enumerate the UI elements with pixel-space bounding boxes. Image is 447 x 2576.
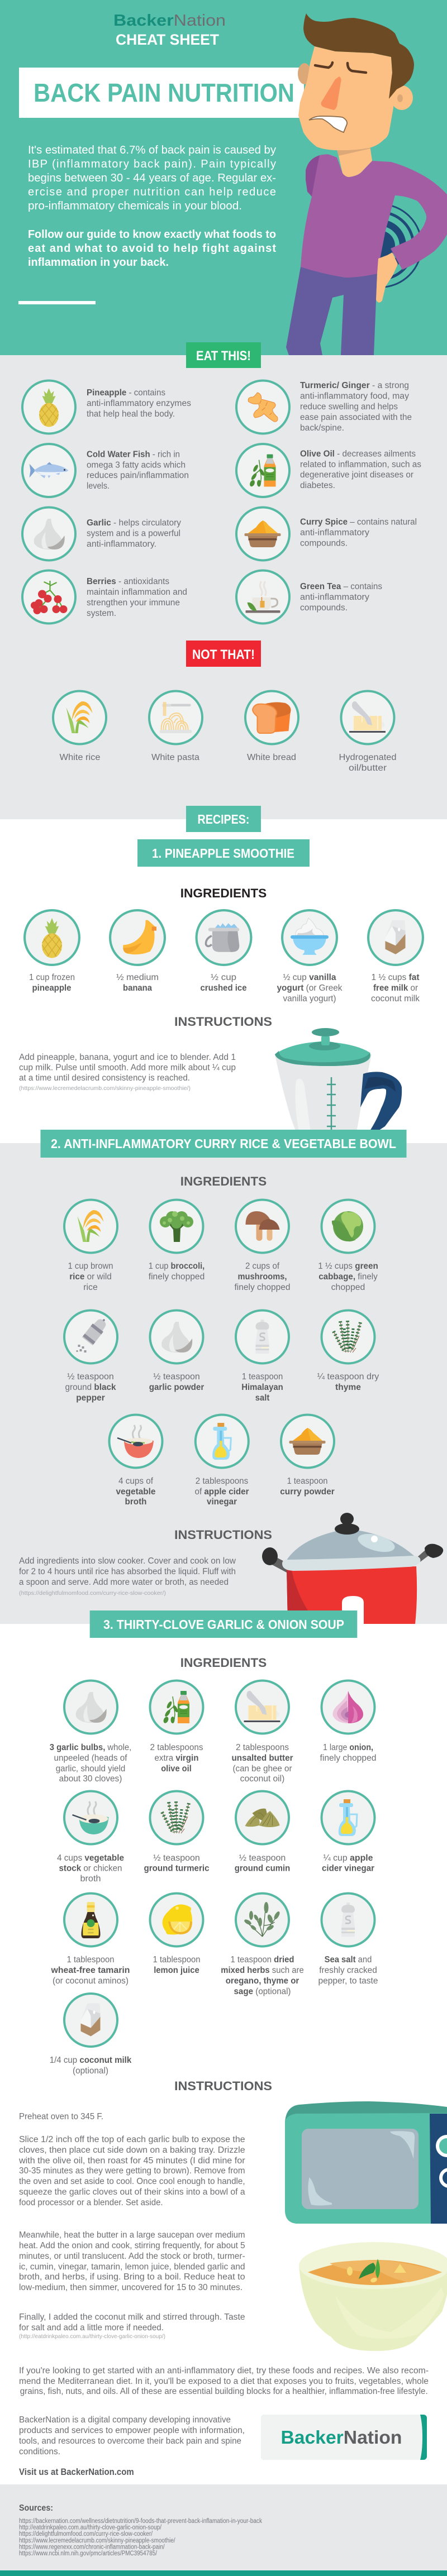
intro paragraph: It's estimated that 6.7% of back pain is caused by [28,144,276,156]
intro paragraph: pro-inflammatory chemicals in your blood. [28,200,242,212]
recipe banner [90,1610,357,1638]
instructions text [19,1053,236,1092]
recipe banner: 2. ANTI-INFLAMMATORY CURRY RICE & VEGETABLE BOWL [51,1136,396,1151]
label: recipes [186,806,261,832]
instructions text: (https://delightfulmomfood.com/curry-rice-slow-cooker/) [19,1590,166,1597]
ingredient: garlic powder: garlic powder [149,1383,204,1392]
ingredient: onion: finely chopped [320,1753,377,1763]
ingredient: curry powder: 1 teaspoon [287,1476,327,1486]
illustration: man with back pain [286,13,447,355]
about BackerNation: tools, and resources to overcome their back pain and spine [19,2436,241,2446]
ingredient: ground cumin [235,1791,290,1873]
illustration: slow cooker [262,1513,443,1624]
ingredient: banana: ½ medium [116,973,159,982]
ingredient: sea salt and pepper: freshly cracked [319,1966,377,1975]
instructions text: Meanwhile, heat the butter in a large saucepan over medium [19,2230,245,2240]
ingredient: apple cider vinegar: cider vinegar [322,1864,374,1873]
sources: https://delightfulmomfood.com/curry-rice-slow-cooker/ [19,2531,153,2537]
heading: instructions: INSTRUCTIONS [174,1528,272,1542]
food: cold water fish: omega 3 fatty acids which [87,460,186,470]
food: olive oil: Olive Oil - decreases ailments [300,449,416,459]
ingredient: apple cider vinegar: ¼ cup apple [323,1853,373,1863]
ingredient: broccoli: 1 cup broccoli, [149,1261,205,1271]
food: turmeric and ginger [236,381,412,433]
ingredient: ground turmeric: ground turmeric [144,1864,210,1873]
instructions text: for salt and add a little more if needed. [19,2323,164,2333]
ingredient: vegetable stock: stock or chicken [59,1864,122,1873]
food: turmeric and ginger: anti-inflammatory food, may [300,391,409,401]
closing paragraph: grains, fish, nuts, and oils. All of these are essential building blocks for a healthier, inflammation-free lifestyle. [20,2387,428,2396]
food: pineapple [22,381,191,433]
instructions text: 30-35 minutes as they were getting to brown). Remove from [19,2166,245,2176]
ingredient: pineapple [25,910,79,993]
ingredient: unsalted butter: 2 tablespoons [236,1743,289,1752]
ingredient: garlic powder [149,1310,204,1392]
ingredient: ground turmeric [144,1791,210,1873]
ingredient: apple cider vinegar [194,1415,249,1507]
ingredient: crushed ice: crushed ice [200,983,247,993]
ingredient: vegetable broth: 4 cups of [118,1476,154,1486]
ingredient: onion: 1 large onion, [323,1743,373,1752]
food: white pasta [149,691,202,762]
intro paragraph: begins between 30 - 44 years of age. Regular ex- [28,172,276,184]
instructions text: cloves, then place cut side down on a baking tray. Drizzle [19,2145,245,2155]
food: curry spice: Curry Spice – contains natural [300,517,417,527]
food: berries [22,571,187,623]
food: white bread [245,691,298,762]
ingredient: milk: coconut milk [371,994,420,1003]
food: berries: strengthen your immune [87,598,180,608]
guide paragraph: Follow our guide to know exactly what foods to [28,228,276,241]
ingredient: dry thyme [317,1310,379,1392]
ingredient: vanilla yogurt: ½ cup vanilla [283,973,336,982]
ingredient: onion [320,1681,377,1763]
instructions text [19,1556,236,1597]
recipe banner [137,839,310,867]
ingredient: dried mixed herbs: sage (optional) [234,1987,291,1996]
label: eat this: EAT THIS! [196,348,251,364]
ingredient: vegetable stock [57,1791,124,1884]
instructions text: for 2 to 4 hours until rice has absorbed the liquid. Fluff with [19,1567,236,1576]
food: cold water fish [22,444,189,497]
sources: https://www.regenexx.com/chronic-inflammation-back-pain/ [19,2544,165,2551]
ingredient: vanilla yogurt: vanilla yogurt) [283,994,336,1003]
ingredient: pineapple: pineapple [32,983,72,993]
food: hydrogenated oil and butter: oil/butter [349,763,387,773]
ingredient: apple cider vinegar: 2 tablespoons [196,1476,248,1486]
ingredient: ground turmeric: ½ teaspoon [153,1853,200,1863]
food: white rice [53,691,106,762]
about BackerNation: Visit us at BackerNation.com [19,2467,134,2477]
food: olive oil: degenerative joint diseases or [300,470,413,480]
food: curry spice: anti-inflammatory [300,528,369,537]
ingredient: garlic bulbs: unpeeled (heads of [54,1753,127,1763]
title bar: BACK PAIN NUTRITION [34,78,294,107]
ingredient: milk [368,910,423,1003]
ingredient: broccoli [149,1199,205,1282]
heading: ingredients: INGREDIENTS [180,1174,267,1188]
ingredient: vegetable stock: 4 cups vegetable [57,1853,124,1863]
subtitle: cheat sheet: CHEAT SHEET [116,31,219,48]
ingredient: wheat-free tamarin: (or coconut aminos) [53,1976,129,1986]
food: curry spice: compounds. [300,538,348,548]
ingredient: garlic powder: ½ teaspoon [153,1372,200,1382]
panel: recipe 2 curry rice bowl [19,1130,443,1624]
heading: instructions: INSTRUCTIONS [174,2079,272,2093]
instructions text: with the olive oil, then roast for 45 minutes (I did mine for [18,2156,245,2166]
food: pineapple: Pineapple - contains [87,388,165,398]
instructions text: ic, cumin, vinegar, tamarin, lemon juice, blended garlic and [19,2262,245,2272]
recipe banner [40,1130,407,1158]
food: garlic: system and is a powerful [87,529,180,538]
food: hydrogenated oil and butter: Hydrogenated [339,753,397,762]
ingredient: apple cider vinegar [322,1791,374,1873]
food: olive oil: diabetes. [300,481,335,490]
ingredient: dried mixed herbs: oregano, thyme or [226,1976,299,1986]
recipe banner: 1. PINEAPPLE SMOOTHIE [152,846,294,861]
instructions text: low-medium, then simmer, uncovered for 15 to 30 minutes. [19,2283,242,2292]
ingredient: sea salt and pepper [318,1893,378,1986]
food: turmeric and ginger: Turmeric/ Ginger - a strong [300,381,409,390]
ingredient: ground cumin: ½ teaspoon [239,1853,286,1863]
food: garlic: anti-inflammatory. [87,539,156,549]
closing paragraph: mend the Mediterranean diet. In it, you'll be exposed to a diet that exposes you to fruits, vegetables, whole [19,2377,429,2386]
instructions text [18,2112,245,2340]
food: cold water fish: reduces pain/inflammation [87,471,189,480]
ingredient: olive oil: extra virgin [154,1753,199,1763]
ingredient: wheat-free tamarin: wheat-free tamarin [50,1966,130,1975]
ingredient: coconut milk [50,1994,132,2076]
ingredient: green cabbage [318,1199,378,1292]
food: turmeric and ginger: back/spine. [300,423,344,433]
logo card: BackerNation [280,2427,402,2448]
ingredient: vanilla yogurt [277,910,343,1003]
food: pineapple: that help heal the body. [87,409,175,419]
instructions text: Finally, I added the coconut milk and stirred through. Taste [19,2312,245,2322]
ingredient: himalayan salt: Himalayan [241,1383,283,1392]
illustration: soup bowl [299,2242,447,2351]
ingredient: lemon juice [150,1893,203,1975]
sources [19,2503,262,2557]
ingredient: olive oil: 2 tablespoons [150,1743,203,1752]
food: white bread: White bread [247,753,296,762]
food: garlic [22,507,181,561]
ingredient: vegetable broth: vegetable [116,1487,156,1497]
ingredient: brown rice [64,1199,117,1292]
food: green tea: Green Tea – contains [300,582,382,591]
ingredient: black pepper [64,1310,117,1403]
ingredient: ground cumin: ground cumin [235,1864,290,1873]
food: cold water fish: levels. [87,481,110,491]
illustration: oven [285,2101,447,2224]
instructions text: minutes, or until translucent. Add the stock or broth, turmer- [19,2252,245,2261]
ingredient: wheat-free tamarin [50,1893,130,1986]
closing paragraph [19,2366,429,2396]
intro paragraph [28,144,276,212]
ingredient: olive oil [150,1681,203,1774]
about BackerNation: conditions. [19,2447,60,2456]
instructions text: Preheat oven to 345 F. [19,2112,103,2121]
panel: not that [53,641,397,773]
ingredient: garlic bulbs: 3 garlic bulbs, whole, [50,1743,131,1752]
ingredient: mushrooms: finely chopped [235,1283,291,1292]
instructions text: (https://www.lecremedelacrumb.com/skinny-pineapple-smoothie/) [19,1085,191,1092]
heading: ingredients: INGREDIENTS [180,1656,267,1670]
ingredient: sea salt and pepper: Sea salt and [325,1955,372,1965]
instructions text: food processor or a blender. Set aside. [19,2198,163,2207]
ingredient: green cabbage: 1 ½ cups green [318,1261,378,1271]
ingredient: banana [110,910,165,993]
about BackerNation: BackerNation is a digital company developing innovative [19,2415,231,2425]
food: berries: maintain inflammation and [87,587,187,597]
food: turmeric and ginger: reduce swelling and helps [300,402,398,412]
ingredient: dry thyme: ¼ teaspoon dry [317,1372,379,1382]
food: olive oil: related to inflammation, such as [300,460,421,469]
ingredient: milk: 1 ½ cups fat [371,973,419,982]
about BackerNation: products and services to empower people with information, [19,2426,245,2435]
instructions text: a spoon and serve. Add more water or broth, as needed [19,1578,229,1587]
ingredient: vegetable broth: broth [125,1497,146,1507]
ingredient: brown rice: 1 cup brown [68,1261,113,1271]
food: green tea: anti-inflammatory [300,592,369,602]
ingredient: vanilla yogurt: yogurt (or Greek [277,983,343,993]
ingredient: himalayan salt [236,1310,289,1403]
heading: instructions: INSTRUCTIONS [174,1015,272,1029]
ingredient: garlic bulbs [50,1681,131,1784]
label: not that [186,641,261,667]
recipe banner: 3. THIRTY-CLOVE GARLIC & ONION SOUP [103,1617,344,1632]
food: cold water fish: Cold Water Fish - rich in [87,450,180,459]
instructions text: (http://eatdrinkpaleo.com.au/thirty-clove-garlic-onion-soup/) [19,2333,165,2340]
food: white pasta: White pasta [151,753,199,762]
ingredient: coconut milk: (optional) [73,2066,108,2076]
ingredient: black pepper: pepper [76,1393,105,1403]
illustration: blender [275,1028,402,1132]
panel: recipe 1 pineapple smoothie [19,839,423,1132]
food: berries: system. [87,609,116,618]
logo card [261,2415,427,2460]
ingredient: vegetable stock: broth [80,1874,101,1884]
food: curry spice [236,507,417,561]
ingredient: apple cider vinegar: vinegar [207,1497,237,1507]
ingredient: coconut milk: 1/4 cup coconut milk [50,2056,132,2065]
ingredient: apple cider vinegar: of apple cider [194,1487,249,1497]
sources: http://eatdrinkpaleo.com.au/thirty-clove-garlic-onion-soup/ [19,2524,162,2531]
ingredient: unsalted butter: (can be ghee or [232,1764,292,1774]
ingredient: sea salt and pepper: pepper, to taste [318,1976,378,1986]
ingredient: crushed ice [197,910,251,993]
ingredient: green cabbage: chopped [331,1283,365,1292]
instructions text: the oven and set aside to cool. Once cool enough to handle, [19,2177,245,2186]
instructions text: broth, and herbs, if using. Bring to a boil. Reduce heat to [19,2272,245,2282]
ingredient: curry powder [280,1415,335,1497]
intro paragraph: IBP (inflammatory back pain). Pain typically [28,158,276,170]
instructions text: at a time until desired consistency is reached. [19,1073,190,1083]
guide paragraph: inflammation in your back. [28,256,169,269]
instructions text: cup milk. Pulse until smooth. Add more milk about ¼ cup [19,1063,236,1072]
closing paragraph: If you're looking to get started with an anti-inflammatory diet, try these foods and recipes. We also recom- [19,2366,429,2376]
ingredient: lemon juice: lemon juice [154,1966,199,1975]
ingredient: black pepper: ½ teaspoon [67,1372,114,1382]
food: pineapple: anti-inflammatory enzymes [87,399,191,408]
intro paragraph: ercise and proper nutrition can help reduce [28,186,276,198]
ingredient: brown rice: rice [83,1283,98,1292]
ingredient: mushrooms: mushrooms, [238,1272,287,1282]
ingredient: olive oil: olive oil [161,1764,192,1774]
sources: https://backernation.com/wellness/dietnutrition/9-foods-that-prevent-back-inflamation-in-your-back [19,2518,262,2525]
heading: ingredients: INGREDIENTS [180,886,267,900]
ingredient: mushrooms [235,1199,291,1292]
ingredient: wheat-free tamarin: 1 tablespoon [67,1955,114,1965]
ingredient: pineapple: 1 cup frozen [29,973,75,982]
instructions text: Add pineapple, banana, yogurt and ice to blender. Add 1 [19,1053,236,1062]
guide paragraph: eat and what to avoid to help fight against [28,242,276,255]
ingredient: lemon juice: 1 tablespoon [153,1955,200,1965]
food: green tea [236,571,382,623]
about BackerNation [19,2415,245,2477]
panel: eat this foods [22,381,421,623]
instructions text: squeeze the garlic cloves out of their skins into a bowl of a [19,2187,245,2197]
food: berries: Berries - antioxidants [87,577,169,586]
food: hydrogenated oil and butter [339,691,397,773]
sources: https://www.ncbi.nlm.nih.gov/pmc/articles/PMC3954785/ [19,2550,158,2557]
ingredient: curry powder: curry powder [280,1487,335,1497]
ingredient: himalayan salt: salt [255,1393,269,1403]
title bar [19,68,304,118]
guide paragraph [28,228,276,269]
ingredient: dried mixed herbs [221,1893,304,1996]
ingredient: dry thyme: thyme [335,1383,361,1392]
sources: Sources: [19,2503,53,2513]
label: eat this [186,342,261,368]
ingredient: green cabbage: cabbage, finely [318,1272,378,1282]
ingredient: vegetable broth [110,1415,162,1507]
panel: recipe 3 garlic and onion soup [18,1610,447,2351]
food: white rice: White rice [59,753,101,762]
food: olive oil [236,444,421,497]
ingredient: unsalted butter: unsalted butter [231,1753,293,1763]
ingredient: mushrooms: 2 cups of [245,1261,280,1271]
label: recipes: RECIPES: [198,812,249,826]
panel: header [18,12,447,368]
instructions text: Add ingredients into slow cooker. Cover and cook on low [19,1556,236,1566]
ingredient: crushed ice: ½ cup [211,973,236,982]
logo: BackerNation: Backer Nation [113,12,226,30]
instructions text: heat. Add the onion and cook, stirring frequently, for about 5 [19,2241,245,2250]
ingredient: unsalted butter [231,1681,293,1784]
ingredient: unsalted butter: coconut oil) [240,1774,284,1784]
instructions text: Slice 1/2 inch off the top of each garlic bulb to expose the [19,2135,245,2144]
ingredient: garlic bulbs: garlic, should yield [56,1764,125,1774]
ingredient: dried mixed herbs: mixed herbs such are [221,1966,304,1975]
ingredient: brown rice: rice or wild [69,1272,112,1282]
sources: https://www.lecremedelacrumb.com/skinny-pineapple-smoothie/ [19,2537,175,2544]
label: not that: NOT THAT! [192,647,255,662]
ingredient: broccoli: finely chopped [149,1272,205,1282]
food: turmeric and ginger: ease pain associated with the [300,413,412,422]
food: garlic: Garlic - helps circulatory [87,518,181,528]
ingredient: milk: free milk or [373,983,418,993]
ingredient: dried mixed herbs: 1 teaspoon dried [230,1955,294,1965]
ingredient: garlic bulbs: about 30 cloves) [59,1774,122,1784]
food: green tea: compounds. [300,603,348,613]
ingredient: himalayan salt: 1 teaspoon [242,1372,283,1382]
ingredient: banana: banana [123,983,152,993]
ingredient: black pepper: ground black [65,1383,116,1392]
